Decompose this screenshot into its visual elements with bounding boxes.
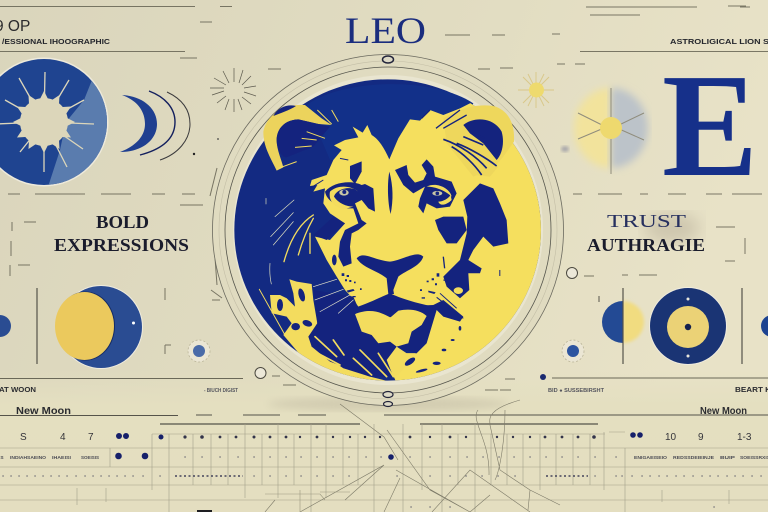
yellow strands <box>259 198 393 377</box>
ring marker bottom <box>383 392 393 398</box>
table row labels left: SOEISIS <box>81 455 100 461</box>
table headings right <box>665 432 752 443</box>
label: at woon: AT WOON <box>0 385 36 394</box>
table headings left: 4 <box>60 432 66 443</box>
moon labels right <box>700 385 768 417</box>
table dot rows <box>3 457 761 507</box>
yellow mottled lower mane <box>270 279 387 381</box>
icon: half moon <box>602 301 644 343</box>
icon: small ringed dot right <box>562 340 584 362</box>
mid labels under emblem <box>204 388 604 394</box>
lunar table <box>0 378 768 512</box>
icon: small yellow sun <box>518 72 554 108</box>
label right: BID ● SUSSEBIRSHT <box>548 388 604 394</box>
yellow face and right field <box>310 103 541 380</box>
text block: trust: AUTHRAGIE <box>587 235 705 255</box>
icon: half yellow half grey sun <box>561 88 648 174</box>
navy holes in mottling <box>277 288 338 365</box>
table lines <box>0 378 768 424</box>
text block: trust <box>587 211 705 255</box>
left ear <box>263 105 338 171</box>
table headings left <box>20 432 94 443</box>
spots on yellow field <box>404 270 500 373</box>
top-left header <box>0 18 111 46</box>
label: new moon right: New Moon <box>700 406 747 417</box>
icon: crescent moon with arcs <box>120 91 219 160</box>
table headings left: 7 <box>88 432 94 443</box>
table row labels left <box>0 455 100 461</box>
table row labels left: IHAEISI <box>52 455 72 461</box>
big letter E: E <box>662 44 758 208</box>
left eye and marks <box>310 158 375 267</box>
table row labels right <box>634 455 768 461</box>
icon: blue sun disc <box>0 58 108 186</box>
ring marker top <box>382 56 394 63</box>
emblem: lion head <box>234 79 541 381</box>
yellow chin <box>355 310 427 347</box>
top-right header label: ASTROLIGICAL LION S <box>670 37 768 46</box>
text block: bold expressions <box>54 212 189 255</box>
icon: line sunburst <box>210 68 256 112</box>
table row labels left: INDIAHSAEINO <box>10 455 46 461</box>
table headings right: 9 <box>698 432 704 443</box>
right mane <box>443 183 508 298</box>
ring marker lower <box>384 402 392 406</box>
icon: left partial circle <box>0 315 11 337</box>
rings around emblem <box>212 54 564 411</box>
dark tick at bottom <box>197 510 212 512</box>
label: new moon left: New Moon <box>16 406 71 417</box>
table headings right: 10 <box>665 432 677 443</box>
table row labels right: ENIGAEISEIO <box>634 455 667 461</box>
navy beard <box>308 290 463 377</box>
icon: target circle <box>649 287 727 365</box>
header subtitle: /ESSIONAL IHOOGRAPHIC <box>2 37 111 46</box>
yellow beard patch <box>387 347 415 377</box>
icon: right partial circle <box>761 315 768 337</box>
text block: bold expressions: BOLD <box>96 212 149 232</box>
whisker spots <box>342 273 439 299</box>
moon labels left <box>0 385 71 417</box>
label: beart: BEART K <box>735 385 768 394</box>
right ear <box>422 105 514 177</box>
label left: - BIUCH DIGIST <box>204 388 238 394</box>
table headings left: S <box>20 432 27 443</box>
text block: trust: TRUST <box>607 211 686 231</box>
table row labels right: BUIP <box>720 455 736 461</box>
map-like crossing lines <box>265 400 560 512</box>
right eye and marks <box>395 159 467 268</box>
center forehead line <box>388 172 393 214</box>
navy table dots <box>115 432 643 460</box>
text block: bold expressions: EXPRESSIONS <box>54 235 189 255</box>
icon: small ringed dot left <box>188 340 210 362</box>
table row labels right: REDSSDEIEINJE <box>673 455 715 461</box>
navy bead <box>540 374 546 380</box>
ring bead right <box>566 268 578 278</box>
title: LEO: LEO <box>345 11 426 52</box>
table headings right: 1-3 <box>737 432 752 443</box>
ring bead left <box>255 368 266 378</box>
nose and mouth <box>353 254 433 317</box>
small table dots <box>183 435 596 439</box>
icon: yellow and blue moon <box>55 285 143 369</box>
